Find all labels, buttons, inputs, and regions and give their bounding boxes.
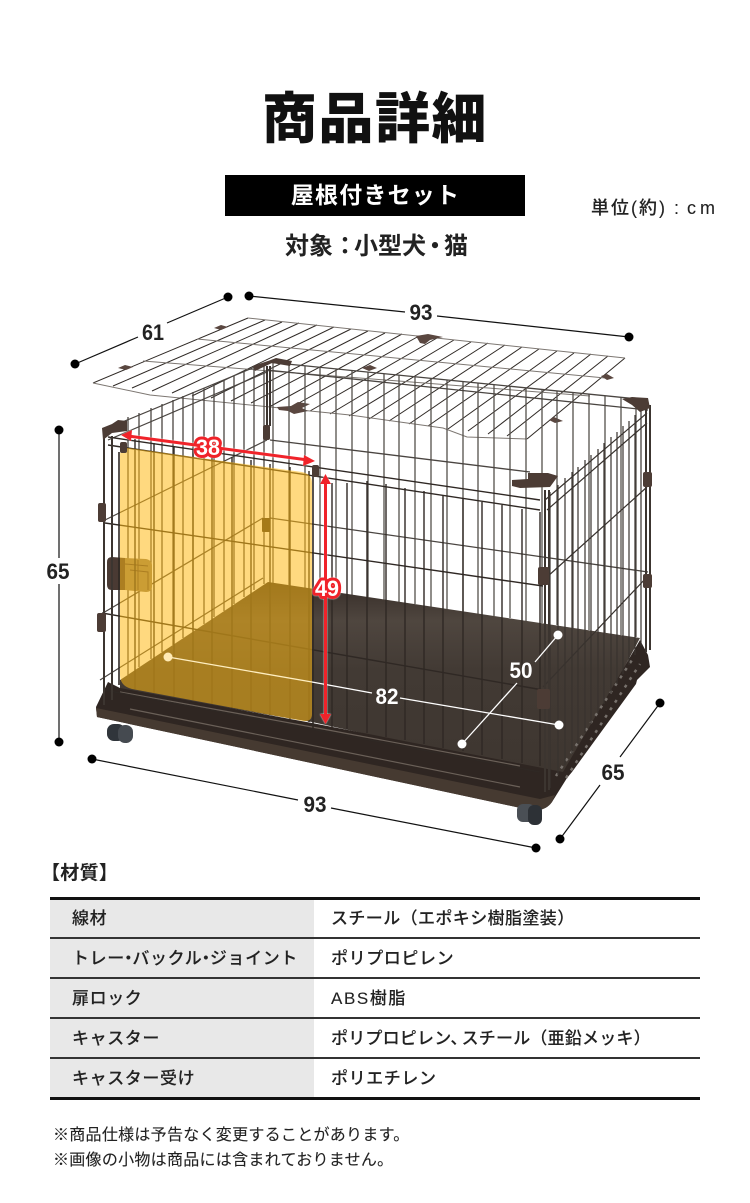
footnotes: ※画像の小物は商品には含まれておりません。 — [53, 1152, 393, 1169]
right wall rails — [543, 413, 647, 687]
banner: set name: 屋根付きセット — [291, 182, 460, 208]
row 2: tray — [50, 939, 454, 977]
row 4: casters — [50, 1019, 651, 1057]
materials table: 線材 — [72, 909, 107, 928]
dimension: roof depth 61: 61 — [142, 320, 164, 345]
door lock — [107, 557, 152, 592]
materials heading: 【材質】 — [41, 863, 118, 884]
target text: 対象：小型犬・猫 — [285, 233, 468, 260]
red arrow: door width 38 — [121, 430, 315, 466]
corner caps and hinges — [97, 358, 652, 709]
materials table: ポリプロピレン、スチール（亜鉛メッキ） — [331, 1029, 651, 1048]
right caster — [517, 804, 542, 825]
roof clips — [118, 325, 614, 423]
front wall rails — [102, 437, 543, 772]
back wall rails — [267, 362, 648, 572]
banner: set name — [226, 175, 525, 216]
left wall rails — [100, 362, 267, 680]
red arrow: door height 49 — [315, 474, 339, 724]
materials table: スチール（エポキシ樹脂塗装） — [331, 909, 575, 928]
tray base — [96, 640, 650, 810]
left wall wires — [128, 364, 264, 675]
tray floor — [120, 582, 640, 778]
roof panel — [93, 318, 625, 439]
dimension: height 65: 65 — [46, 559, 70, 584]
dimension: bottom depth 65: 65 — [602, 760, 624, 785]
unit note: 単位(約) : cm — [591, 198, 719, 218]
inner dimension: depth 50 — [458, 630, 562, 748]
dimension: bottom width 93: 93 — [304, 792, 326, 817]
inner dimension: width 82: 82 — [376, 684, 398, 709]
dimension: roof depth 61 — [70, 292, 232, 368]
row 1: wire — [50, 900, 575, 937]
left caster — [107, 724, 133, 743]
red arrow: door width 38: 38 — [196, 435, 220, 460]
row 5: caster receiver — [50, 1059, 437, 1097]
back wall wires — [273, 363, 636, 637]
right side slats — [556, 660, 640, 778]
materials table: キャスター受け — [72, 1069, 195, 1088]
inner dimension: depth 50: 50 — [510, 658, 532, 683]
right wall wires — [550, 410, 641, 788]
footnotes — [53, 1126, 410, 1169]
title: 商品詳細 — [262, 88, 488, 150]
yellow door highlight — [120, 448, 312, 721]
row 3: door lock — [50, 979, 407, 1017]
materials table: 扉ロック — [72, 989, 142, 1008]
dimension: roof width 93 — [244, 292, 634, 342]
door latch under highlight — [262, 518, 270, 532]
dimension: bottom width 93 — [88, 754, 540, 852]
materials table: ポリプロピレン — [331, 949, 454, 968]
diagram: cage with dimensions — [46, 292, 664, 852]
red arrow: door height 49: 49 — [315, 576, 339, 601]
materials table: キャスター — [72, 1029, 160, 1048]
door frame — [119, 452, 313, 728]
materials table: トレー・バックル・ジョイント — [72, 949, 298, 968]
dimension: height 65 — [46, 426, 70, 746]
footnotes: ※商品仕様は予告なく変更することがあります。 — [53, 1127, 410, 1144]
front wall wires — [135, 439, 540, 766]
dimension: bottom depth 65 — [556, 698, 664, 844]
inner dimension: width 82 — [164, 652, 564, 730]
base front highlight — [96, 708, 555, 810]
base rail line — [120, 692, 520, 787]
corner posts — [104, 366, 650, 792]
dimension: roof width 93: 93 — [410, 300, 432, 325]
materials table: ポリエチレン — [331, 1069, 437, 1088]
materials table: ABS樹脂 — [331, 989, 407, 1008]
